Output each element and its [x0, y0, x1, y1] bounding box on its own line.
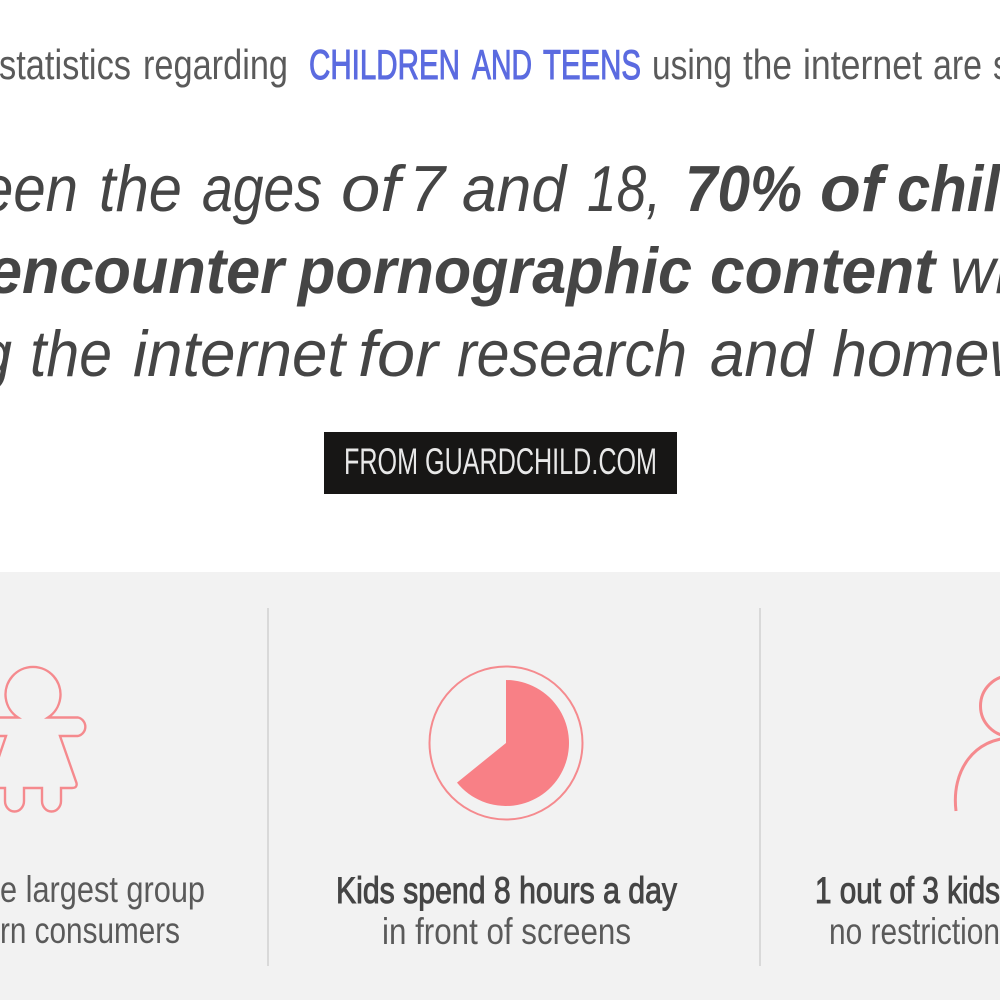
main statistic heading: of: [341, 152, 406, 225]
main statistic heading: the: [99, 152, 182, 225]
main statistic heading: for: [358, 317, 440, 390]
source badge: [324, 432, 677, 494]
stat text: left column: [0, 869, 205, 951]
panel: statistics band: [0, 572, 1000, 1000]
main statistic heading: [0, 152, 1000, 390]
main statistic heading: 70%: [685, 152, 802, 225]
stat text: left column: e largest group: [0, 869, 205, 910]
main statistic heading: content: [710, 234, 937, 307]
intro text line: statistics: [0, 41, 131, 88]
intro text line: TEENS: [543, 41, 641, 88]
icon: clock pie: [430, 666, 582, 820]
main statistic heading: and: [710, 317, 815, 390]
main statistic heading: the: [30, 317, 112, 390]
icon: person: [955, 676, 1000, 811]
main statistic heading: pornographic: [296, 234, 692, 307]
stat text: centre column: [336, 870, 677, 952]
intro text line: internet: [803, 41, 922, 88]
stat text: left column: rn consumers: [0, 910, 180, 951]
intro text line: are: [933, 41, 982, 88]
main statistic heading: internet: [133, 317, 348, 390]
stat text: right column: [815, 870, 1000, 952]
main statistic heading: research: [457, 317, 687, 390]
intro text line: CHILDREN: [309, 41, 460, 88]
source badge: FROM GUARDCHILD.COM: [344, 441, 657, 482]
main statistic heading: 18,: [587, 152, 661, 225]
intro text line: the: [743, 41, 792, 88]
stat text: centre column: Kids spend 8 hours a day: [336, 870, 677, 911]
main statistic heading: 7: [409, 152, 448, 225]
intro text line: regarding: [143, 41, 288, 88]
intro text line: using: [652, 41, 732, 88]
main statistic heading: and: [462, 152, 568, 225]
intro text line: AND: [472, 41, 532, 88]
stat text: centre column: in front of screens: [382, 911, 631, 952]
icon: child figure: [0, 667, 85, 812]
main statistic heading: ages: [202, 152, 322, 225]
intro text line: [0, 41, 1000, 88]
main statistic heading: of: [820, 152, 890, 225]
